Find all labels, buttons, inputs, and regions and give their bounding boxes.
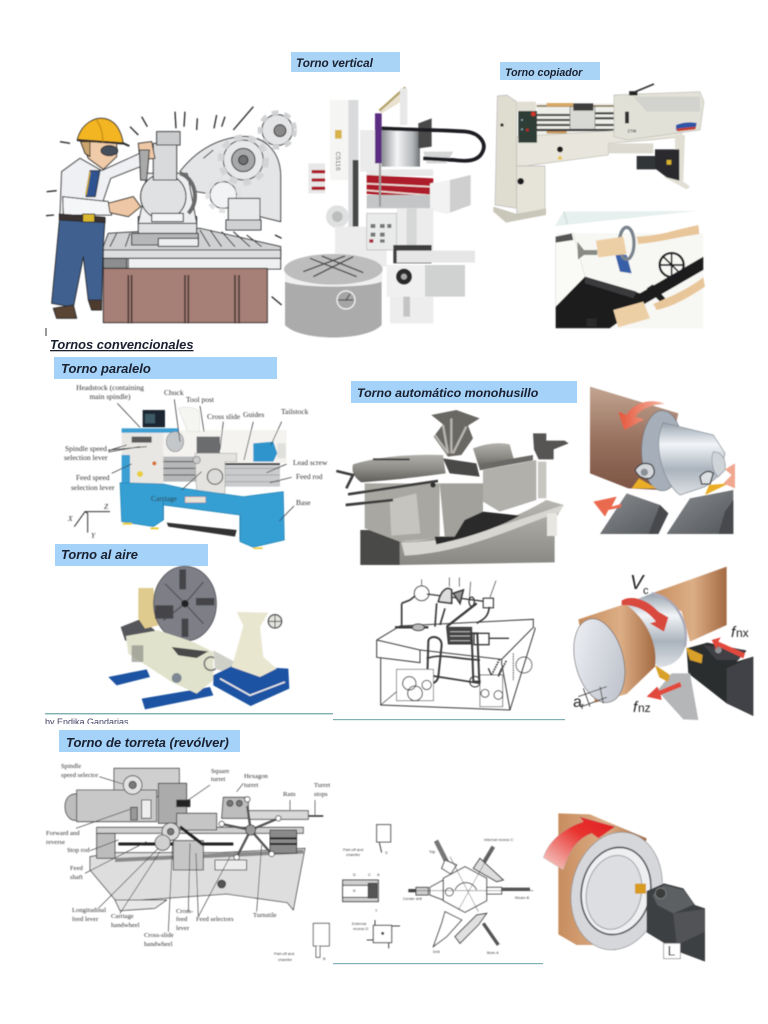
black rails xyxy=(556,257,703,328)
tool labels: Center drill xyxy=(403,896,422,901)
label: Torno automático monohusillo: Torno automático monohusillo xyxy=(357,386,539,400)
photo: wood lathe xyxy=(555,211,705,328)
bed xyxy=(90,848,305,910)
callout labels: selection lever xyxy=(71,483,115,492)
lower plate xyxy=(657,673,698,720)
switch box xyxy=(547,513,557,536)
tailstock xyxy=(232,612,277,677)
cutting parameters: a xyxy=(573,694,582,711)
callout labels: turret xyxy=(211,776,225,783)
illustration: copying lathe: ZTM xyxy=(627,129,637,134)
motor xyxy=(637,156,657,169)
label: Torno copiador: Torno copiador xyxy=(505,67,583,79)
callout labels: X xyxy=(67,514,73,523)
circular table xyxy=(285,270,382,337)
headstock xyxy=(556,233,585,307)
right housing xyxy=(483,460,536,512)
rule with faint credit: by Endika Gandarias xyxy=(45,717,129,727)
cable xyxy=(382,128,484,161)
right head xyxy=(614,92,704,140)
groove xyxy=(627,593,687,667)
callout labels: Stop rod xyxy=(67,847,90,854)
cutting parameters: nx xyxy=(736,626,749,640)
rule under cam schematic xyxy=(333,719,565,720)
end face xyxy=(566,613,633,708)
photo: air lathe xyxy=(108,566,289,709)
handwheel xyxy=(326,205,349,228)
tailstock xyxy=(253,442,277,462)
callout labels: Cross- xyxy=(176,908,193,915)
label: Torno automático monohusillo xyxy=(351,381,577,403)
back panel xyxy=(163,430,287,463)
callout labels: Guides xyxy=(243,410,264,419)
pedestal xyxy=(365,483,440,542)
rails and spindles xyxy=(537,103,627,137)
photo: single-spindle automatic lathe xyxy=(336,410,569,565)
tool labels: Ream B xyxy=(515,895,529,900)
plate and lower block xyxy=(393,245,432,263)
machine box xyxy=(377,619,533,659)
foot xyxy=(493,207,546,223)
label: Torno vertical: Torno vertical xyxy=(296,57,374,70)
rotation arrow xyxy=(622,598,668,632)
top frame and gold bar xyxy=(379,87,406,113)
callout labels: handwheel xyxy=(144,941,173,948)
knob xyxy=(647,284,665,302)
callout labels: shaft xyxy=(70,874,83,881)
label: Torno de torreta (revólver) xyxy=(59,730,240,752)
cutting parameters: c xyxy=(643,585,649,597)
square turret xyxy=(158,783,187,823)
tool labels: Part-off and xyxy=(343,847,363,852)
callout labels: feed lever xyxy=(72,916,99,923)
L badge xyxy=(664,943,680,959)
callout labels: Spindle xyxy=(61,763,81,770)
callout labels: Feed xyxy=(70,865,84,872)
tool labels: D xyxy=(353,872,356,877)
label: Torno copiador xyxy=(500,62,600,80)
collar ring xyxy=(642,411,683,491)
lower wood xyxy=(613,302,650,327)
diagram: hexagon turret tooling xyxy=(343,825,533,955)
callout labels: Forward and xyxy=(46,830,80,837)
top fan xyxy=(431,410,480,457)
table xyxy=(103,228,281,257)
feet xyxy=(108,669,150,685)
rotation arrow xyxy=(543,817,615,870)
diagram: turret lathe with callouts xyxy=(46,763,330,962)
hand wheel xyxy=(660,253,684,277)
top cams xyxy=(414,586,429,601)
callout labels: Feed selectors xyxy=(196,916,234,923)
pipe housing xyxy=(180,137,281,222)
spindle xyxy=(447,627,472,644)
dark lower body xyxy=(360,530,402,565)
illustration: vertical lathe: C5116 xyxy=(334,152,341,171)
tool labels: C xyxy=(368,872,371,877)
rotation arrow xyxy=(618,401,665,430)
left copper xyxy=(578,604,656,703)
hexagon turret xyxy=(222,797,248,818)
callout labels xyxy=(64,383,328,540)
motor and wiring xyxy=(121,619,157,645)
tool labels: chamfer xyxy=(346,852,361,857)
workpiece xyxy=(558,813,647,945)
callout labels: Spindle speed xyxy=(65,444,107,453)
right tool xyxy=(667,490,733,534)
callout labels: Cross slide xyxy=(207,412,241,421)
callout labels: lever xyxy=(176,925,190,932)
gear panels xyxy=(397,669,433,701)
hexagon xyxy=(443,867,487,912)
leader lines xyxy=(76,777,315,932)
head and hard hat xyxy=(82,142,117,169)
callout labels: Ram xyxy=(283,791,296,798)
ways xyxy=(163,457,197,482)
workpiece xyxy=(590,387,678,490)
tool labels: External xyxy=(352,921,366,926)
callout labels: Base xyxy=(296,498,311,507)
cutting parameters: nz xyxy=(638,701,651,715)
main gear xyxy=(223,140,263,180)
belts xyxy=(427,637,442,683)
callout labels: Part-off and xyxy=(274,951,294,956)
callout labels: Turret xyxy=(314,782,330,789)
machine head xyxy=(138,217,197,233)
heading: Tornos convencionales: Tornos convencionales xyxy=(50,337,194,352)
left pillar xyxy=(495,95,517,208)
left tool xyxy=(600,493,668,534)
apron xyxy=(173,841,203,870)
headstock xyxy=(77,790,157,822)
motion ticks xyxy=(46,107,282,305)
callout labels: reverse xyxy=(46,839,65,846)
callout labels: Tool post xyxy=(186,395,215,404)
callout labels: turret xyxy=(244,782,258,789)
callout labels: handwheel xyxy=(111,922,140,929)
callout labels: Turnstile xyxy=(253,912,277,919)
callout labels: Tailstock xyxy=(281,407,309,416)
upper column panels xyxy=(330,100,348,180)
cutting parameters: f xyxy=(633,699,639,716)
callout labels xyxy=(46,763,330,962)
motor xyxy=(65,794,77,820)
right barrel xyxy=(473,443,515,469)
tool labels: Internal recess C xyxy=(484,837,514,842)
tool labels: Tap xyxy=(429,849,435,854)
diagram: parallel lathe with callouts xyxy=(64,383,328,549)
legs xyxy=(52,215,105,307)
schematic: cam automatic lathe xyxy=(377,577,535,710)
label: Torno vertical xyxy=(291,52,400,72)
feed arrows xyxy=(593,497,621,517)
ring face xyxy=(560,824,673,958)
callout labels: speed selector xyxy=(61,772,99,779)
right leg xyxy=(663,135,690,189)
callout labels: Carriage xyxy=(151,494,177,503)
callout labels: Cross-slide xyxy=(144,932,174,939)
small tool xyxy=(313,923,329,946)
cabinet xyxy=(103,268,267,323)
lower turret block xyxy=(270,830,297,853)
leader lines xyxy=(108,399,294,521)
illustration: turning with cutting parameters xyxy=(566,567,753,720)
tailstock base xyxy=(213,665,289,706)
axes xyxy=(74,512,110,533)
silver body xyxy=(659,423,725,495)
insert xyxy=(635,884,646,894)
dark interior xyxy=(435,512,520,544)
chips xyxy=(635,463,654,479)
callout labels: Carriage xyxy=(111,913,134,920)
spindle mount xyxy=(577,242,597,260)
control panel xyxy=(518,111,537,143)
face plate xyxy=(154,566,216,641)
feed arrows xyxy=(712,637,745,658)
tool labels: Drill xyxy=(433,949,440,954)
headstock xyxy=(126,630,213,694)
right tool xyxy=(687,643,753,716)
tool labels: A xyxy=(377,872,380,877)
illustration: vertical lathe xyxy=(284,87,484,337)
lower gear xyxy=(210,182,237,208)
boots xyxy=(53,305,77,318)
external recess xyxy=(373,925,392,943)
callout labels: main spindle) xyxy=(89,392,131,401)
red band xyxy=(367,169,433,176)
tools xyxy=(436,841,452,872)
upper headstock xyxy=(114,768,179,797)
cutting parameters: V xyxy=(630,572,645,594)
illustration: copying lathe xyxy=(493,84,704,223)
label: Torno de torreta (revólver): Torno de torreta (revólver) xyxy=(66,735,229,750)
callout labels: Feed speed xyxy=(76,473,110,482)
tool holder xyxy=(647,883,705,962)
tool labels: Bore A xyxy=(487,950,499,955)
illustration: boring tool in workpiece: L xyxy=(668,943,676,959)
rule under hexagon diagram xyxy=(333,963,543,964)
tool labels: T xyxy=(375,908,378,913)
illustration: turning with two tools xyxy=(590,387,735,534)
label: Torno paralelo: Torno paralelo xyxy=(61,361,151,376)
carriage xyxy=(197,437,220,453)
callout labels: selection lever xyxy=(64,453,108,462)
tool post xyxy=(533,433,569,459)
callout labels: Z xyxy=(104,502,109,511)
illustration: worker operating a machine xyxy=(46,107,295,323)
headstock xyxy=(122,428,163,485)
ram xyxy=(248,811,308,819)
callout labels: Y xyxy=(91,531,96,540)
small insert xyxy=(377,825,391,842)
callout labels: Chuck xyxy=(164,388,184,397)
pedestal xyxy=(517,166,545,214)
callout labels: stops xyxy=(314,791,328,798)
callout labels: Longitudinal xyxy=(72,907,106,914)
blue base xyxy=(120,483,284,547)
section xyxy=(343,880,378,902)
tool labels: recess D xyxy=(353,926,369,931)
upper gear xyxy=(262,115,293,145)
tub xyxy=(400,500,564,565)
label: Torno al aire: Torno al aire xyxy=(61,547,138,562)
rod xyxy=(118,839,233,848)
label: Torno paralelo xyxy=(54,357,277,379)
capstan xyxy=(222,806,278,857)
tool labels: S xyxy=(385,850,388,855)
housing and cylinder xyxy=(360,130,382,172)
torso xyxy=(60,153,140,215)
rods xyxy=(336,471,438,505)
right box xyxy=(423,152,453,163)
callout labels: chamfer xyxy=(278,957,293,962)
right copper xyxy=(652,567,727,642)
block wood xyxy=(596,237,627,257)
rule with faint credit xyxy=(40,713,340,730)
label: Torno al aire xyxy=(55,544,208,566)
cutting parameters: f xyxy=(731,624,737,641)
tool labels xyxy=(343,837,529,955)
control panel xyxy=(367,213,397,250)
gear box xyxy=(228,198,260,220)
tool labels: B xyxy=(353,888,356,893)
guard xyxy=(615,253,632,273)
bed xyxy=(213,650,235,675)
left barrel xyxy=(352,455,446,482)
callout labels: Square xyxy=(211,768,229,775)
inserts xyxy=(632,478,657,488)
handwheels xyxy=(162,823,179,840)
beam xyxy=(517,127,682,166)
callout labels: Headstock (containing xyxy=(76,383,144,392)
chuck xyxy=(166,432,184,452)
pale wedge xyxy=(555,211,697,226)
callout labels: Lead screw xyxy=(293,458,328,467)
callout labels: Hexagon xyxy=(244,773,269,780)
illustration: boring tool in workpiece xyxy=(543,813,705,962)
hands xyxy=(108,197,141,217)
cutting parameters xyxy=(573,572,749,716)
callout labels: Feed rod xyxy=(296,472,323,481)
background xyxy=(557,233,703,328)
callout labels: feed xyxy=(176,916,188,923)
small red guard xyxy=(308,163,325,193)
lower column xyxy=(397,208,433,250)
callout labels: B xyxy=(323,956,326,961)
beige box xyxy=(138,588,158,629)
central column xyxy=(440,483,483,537)
rear bed xyxy=(97,827,303,833)
cutting parameters: r xyxy=(581,701,584,711)
